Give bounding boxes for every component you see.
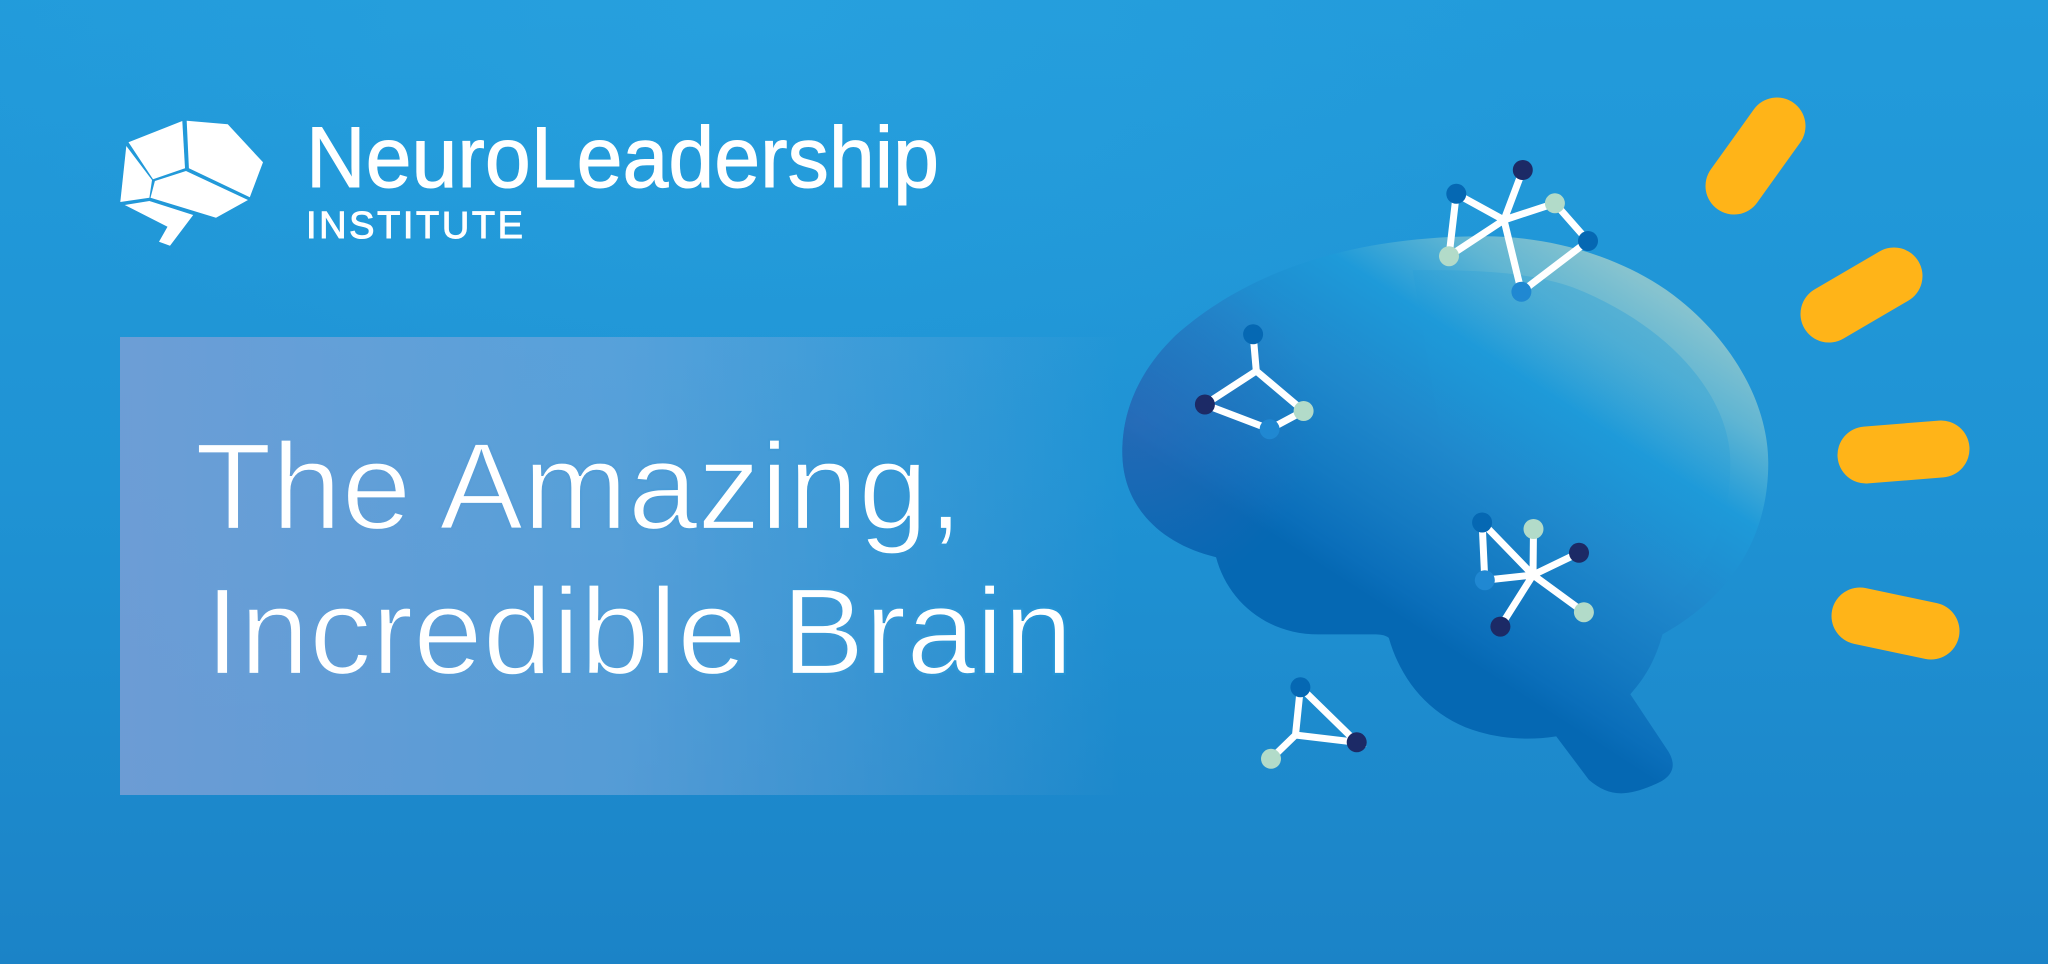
title	[195, 419, 1073, 701]
neural network: bottom	[1261, 677, 1367, 769]
title: The Amazing,	[195, 419, 963, 556]
neural network: centre	[1472, 512, 1594, 637]
icon: polygon brain logo mark	[120, 121, 263, 246]
title panel	[120, 337, 1120, 795]
idea rays	[1734, 126, 1941, 631]
brain illustration	[1122, 236, 1768, 793]
title: Incredible Brain	[205, 564, 1073, 701]
logo	[120, 110, 939, 247]
neural network: left	[1195, 324, 1314, 439]
neural network: top	[1439, 160, 1598, 302]
logo subtitle: INSTITUTE	[306, 205, 523, 247]
logo wordmark: NeuroLeadership	[306, 110, 939, 206]
